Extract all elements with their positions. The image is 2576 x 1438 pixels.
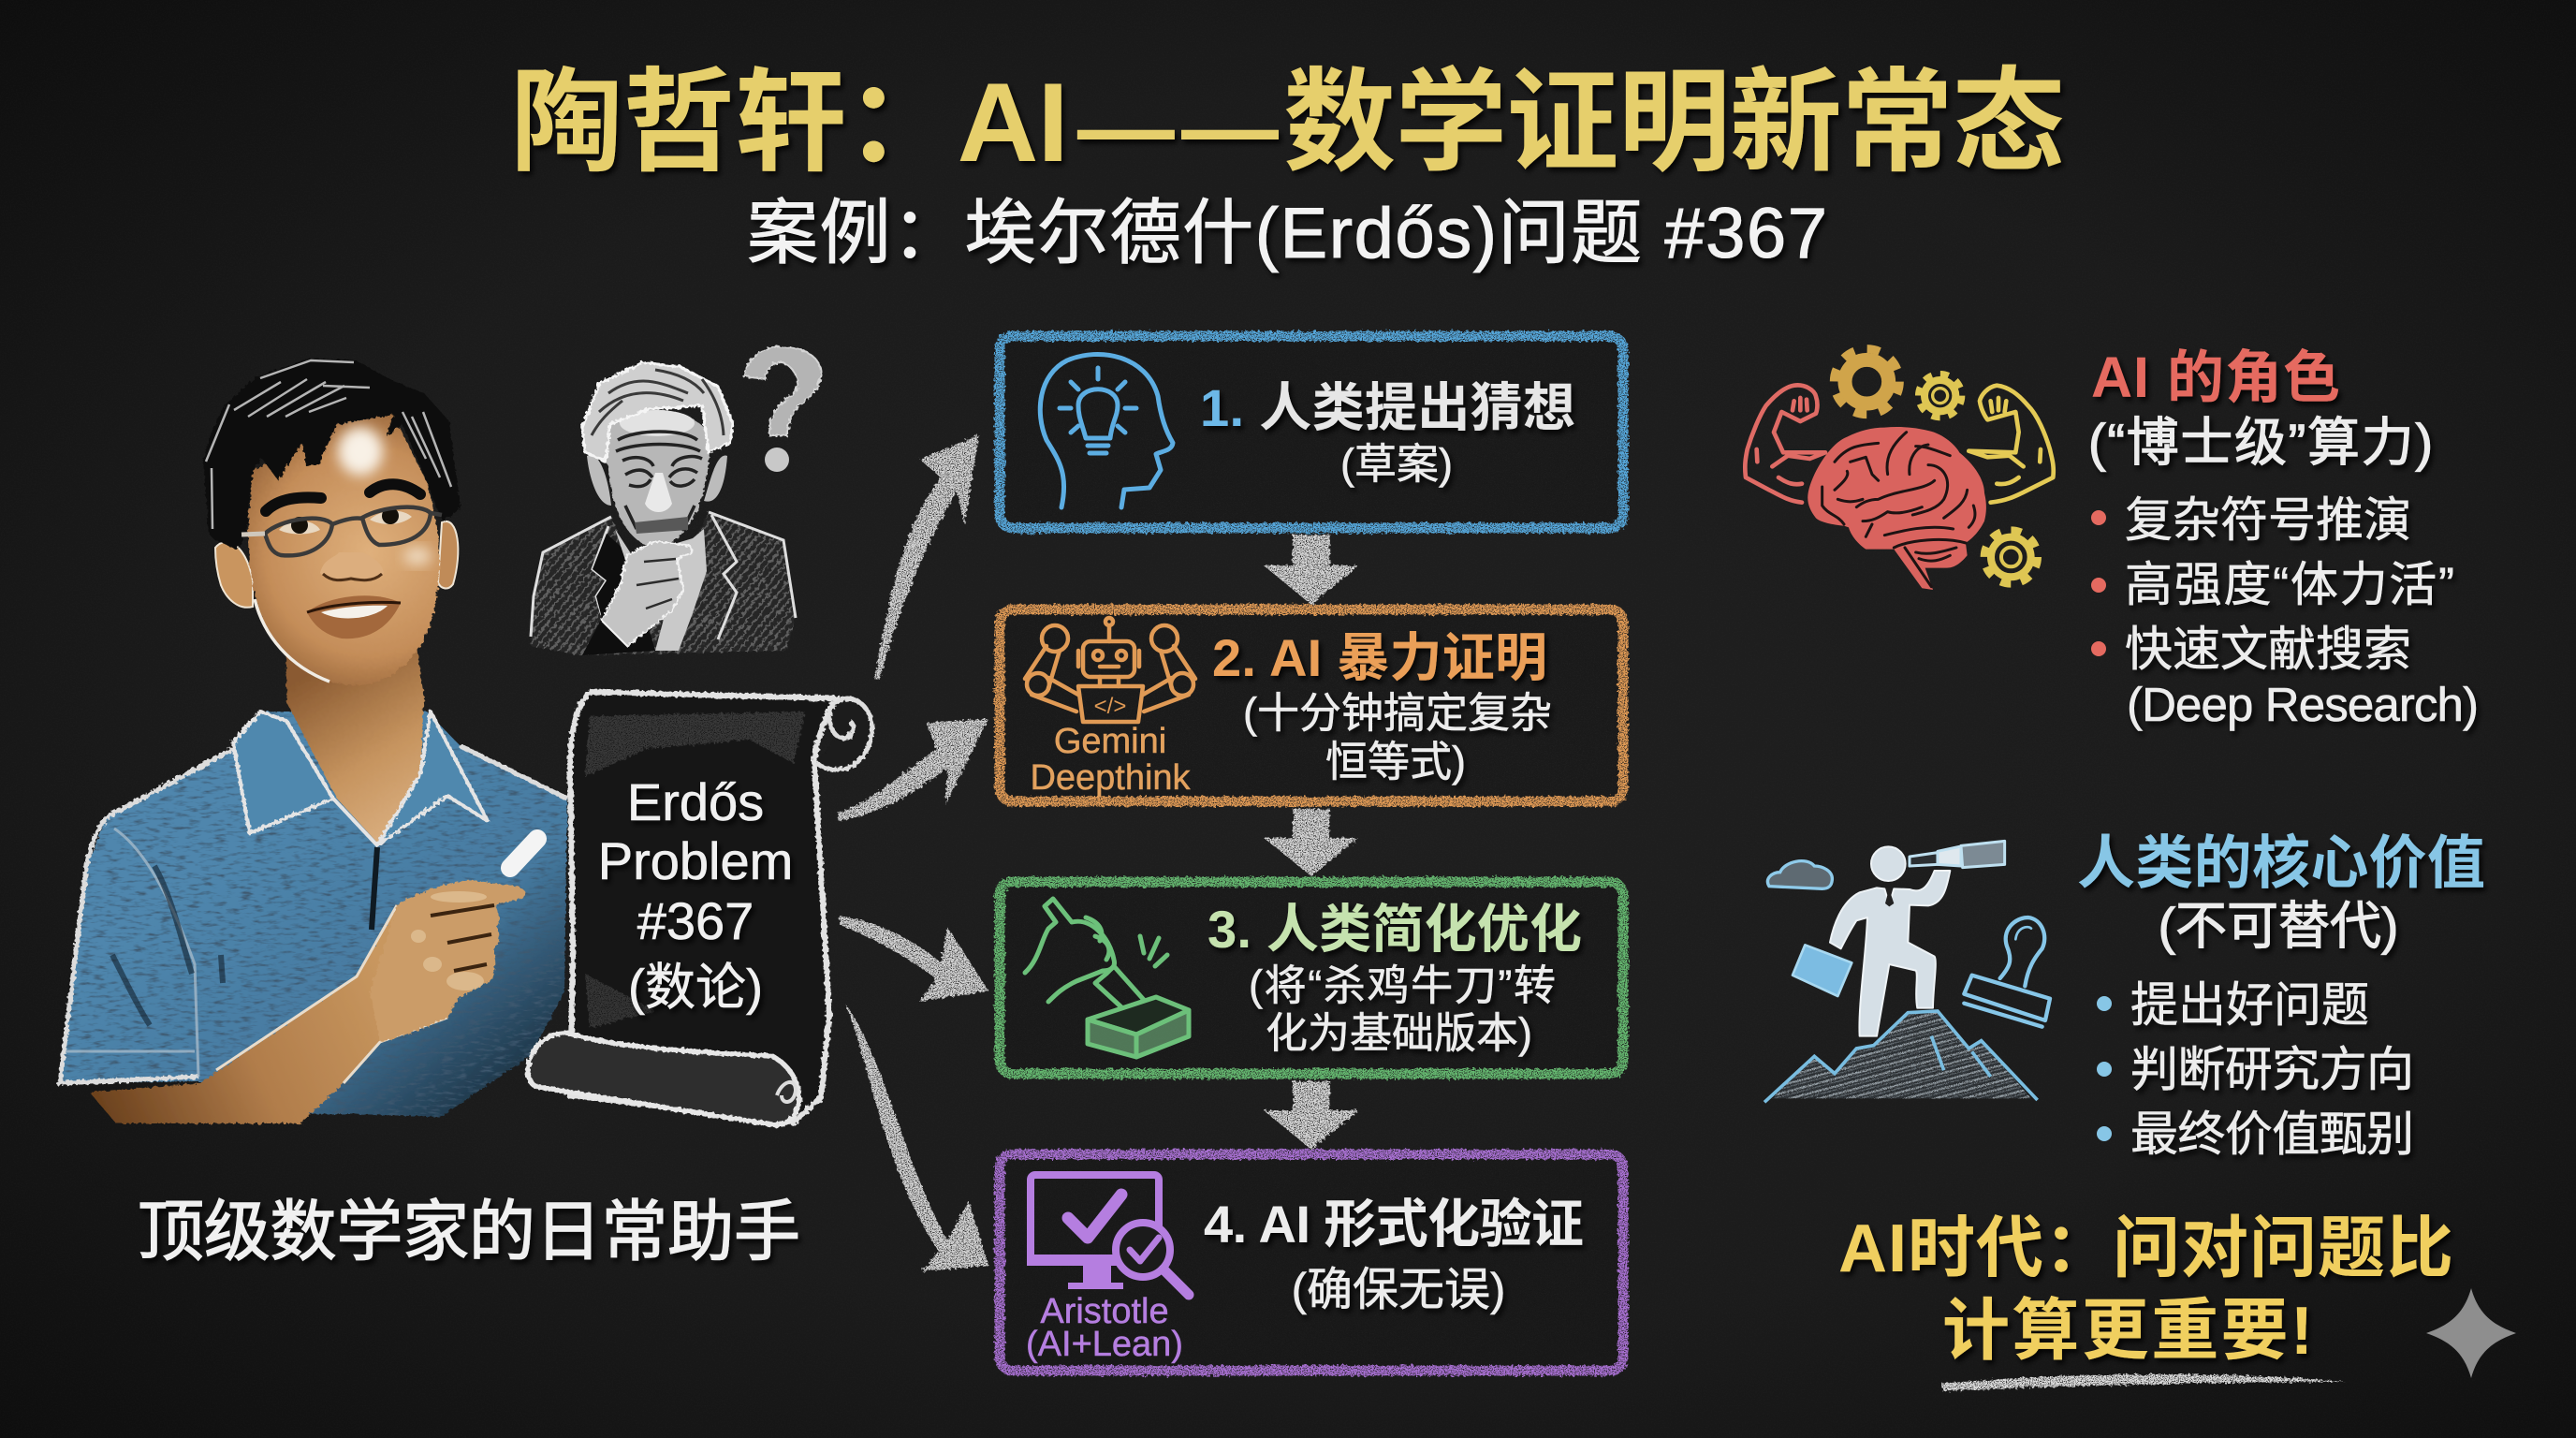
AI role bullets: (Deep Research) [2127, 678, 2479, 731]
cheek highlight [403, 547, 432, 565]
scroll text [598, 772, 793, 1016]
human value bullets: 最终价值甄别 [2130, 1108, 2414, 1161]
shirt front [615, 529, 707, 651]
left ear [215, 542, 253, 608]
AI role bullets: 快速文献搜索 [2125, 623, 2411, 676]
step 3 heading: 3. 人类简化优化 [1208, 900, 1582, 959]
step 1 heading: 1. 人类提出猜想 [1200, 378, 1575, 437]
scroll text: (数论) [628, 960, 763, 1016]
forearm [90, 905, 447, 1123]
question mark dot [765, 448, 789, 472]
hand on chin [602, 541, 693, 646]
nose [645, 473, 672, 512]
icon: strong robot: </> [1094, 694, 1126, 719]
pupils [291, 507, 399, 534]
jacket [531, 512, 796, 655]
icon label: Gemini Deepthink: Deepthink [1030, 758, 1192, 798]
arrow to step 2 [838, 719, 988, 821]
heading: human core value: 人类的核心价值 [2077, 831, 2485, 896]
chalk stick [510, 839, 537, 868]
frame [1000, 1154, 1623, 1371]
gear small [1918, 374, 1962, 418]
step 2 note [1243, 689, 1552, 785]
shirt dark folds [112, 866, 223, 1025]
scroll text: Erdős [627, 772, 764, 831]
head [1871, 846, 1906, 881]
sparkle watermark [2426, 1288, 2516, 1378]
icon: strong robot [1025, 618, 1195, 722]
arrow to step 4 [845, 1004, 988, 1271]
icon: hand with knife on box [1025, 899, 1189, 1057]
wrinkles and eyes [616, 432, 702, 529]
gear lower [1984, 530, 2038, 584]
stamp [1964, 917, 2050, 1027]
heading: AI role: AI 的角色 [2091, 345, 2340, 409]
down arrow 2 [1264, 809, 1358, 876]
AI role bullets: 复杂符号推演 [2125, 493, 2411, 547]
right ear [438, 521, 458, 588]
placket [372, 847, 377, 930]
icon: head with lightbulb [1040, 354, 1173, 507]
icon label: Gemini Deepthink [1030, 722, 1192, 798]
question mark [744, 346, 821, 435]
finger lines [637, 559, 679, 609]
step 3 note [1249, 961, 1556, 1057]
icon label: Aristotle (AI+Lean): (AI+Lean) [1026, 1325, 1183, 1364]
conclusion callout: AI时代：问对问题比 [1838, 1211, 2453, 1286]
title: 陶哲轩：AI——数学证明新常态 [511, 60, 2065, 185]
face [607, 410, 710, 548]
right arm [1969, 386, 2054, 503]
white hair [582, 362, 733, 462]
icon: muscular brain with gears [1745, 349, 2054, 590]
bottom roll [528, 1033, 799, 1125]
step 4 heading: 4. AI 形式化验证 [1204, 1195, 1584, 1254]
step 2 note: 恒等式) [1325, 738, 1466, 785]
finger lines [431, 905, 494, 971]
sub heading: PhD-level compute: (“博士级”算力) [2088, 413, 2433, 472]
neck [285, 646, 424, 843]
step 3: human simplification [1000, 882, 1623, 1074]
glasses [265, 507, 442, 555]
human value bullets: 提出好问题 [2130, 978, 2369, 1032]
telescope [1910, 841, 2005, 868]
step 1: human conjecture [1000, 336, 1623, 528]
bottom curl line [777, 1082, 796, 1102]
caption: daily assistant: 顶级数学家的日常助手 [138, 1196, 800, 1269]
AI role bullets [2091, 493, 2479, 731]
arrow to step 3 [840, 916, 988, 1002]
step 4: AI formal verification [1000, 1154, 1623, 1371]
brain [1808, 427, 1986, 590]
frame [1000, 882, 1623, 1074]
briefcase [1793, 945, 1852, 996]
eyes [279, 511, 412, 534]
hair highlights [206, 360, 451, 529]
icon label: Gemini Deepthink: Gemini [1054, 722, 1166, 761]
upper lip shadow [635, 517, 688, 534]
parchment top hatching [585, 712, 805, 777]
nose [320, 552, 384, 580]
chalk underline [1942, 1374, 2346, 1391]
nose shadow [323, 574, 382, 580]
blue polo shirt [60, 712, 567, 1117]
forehead light [620, 410, 695, 436]
icon: monitor with check and magnifier [1027, 1175, 1189, 1295]
scroll text: Problem [598, 831, 793, 890]
conclusion callout [1838, 1211, 2453, 1391]
frame [1000, 609, 1623, 801]
arrow to step 1 [874, 434, 979, 679]
human value bullets [2097, 978, 2414, 1161]
mountain [1772, 1011, 2031, 1098]
subtitle: 案例：埃尔德什(Erdős)问题 #367 [747, 194, 1827, 273]
knuckle highlights [411, 891, 487, 990]
frame [1000, 336, 1623, 528]
cloud [1767, 861, 1832, 888]
left arm [1745, 385, 1825, 503]
step 2 note: (十分钟搞定复杂 [1243, 689, 1552, 737]
hair [203, 359, 461, 550]
AI role bullets: 高强度“体力活” [2125, 558, 2454, 611]
scroll text: #367 [637, 891, 754, 950]
icon label: Aristotle (AI+Lean): Aristotle [1040, 1292, 1169, 1331]
scroll: Erdős Problem #367 [528, 692, 872, 1125]
step 2: AI brute-force proof [1000, 609, 1623, 801]
down arrow 3 [1264, 1081, 1358, 1150]
hand [370, 880, 526, 1042]
teeth [321, 606, 388, 618]
parchment lower smudge [585, 974, 655, 1028]
forearm edge [216, 905, 447, 1083]
icon: man with telescope on mountain [1764, 841, 2050, 1102]
step 2 heading: 2. AI 暴力证明 [1212, 628, 1547, 687]
jacket outline [531, 512, 796, 639]
glasses temple [242, 534, 265, 535]
sub heading: irreplaceable: (不可替代) [2159, 897, 2398, 955]
step 3 note: (将“杀鸡牛刀”转 [1249, 961, 1556, 1009]
shirt outline [60, 746, 567, 1083]
jaw outline [255, 599, 329, 682]
arrows: scroll to steps [838, 434, 988, 1271]
sleeve seams [66, 829, 198, 1077]
hair strands [592, 370, 724, 435]
panel: AI role [1745, 345, 2479, 731]
gear large [1834, 349, 1899, 415]
ears [587, 455, 727, 506]
figure [1830, 871, 1950, 1036]
illustration: Terence Tao with chalk [60, 359, 567, 1123]
dark lapel [582, 534, 655, 655]
mountain outline [1764, 1011, 2038, 1102]
eyebrows [266, 484, 420, 511]
step 3 note: 化为基础版本) [1266, 1009, 1532, 1057]
icon label: Aristotle (AI+Lean) [1026, 1292, 1183, 1364]
parchment body [570, 692, 836, 1123]
portrait: Paul Erdős [531, 346, 821, 655]
forehead highlight [338, 427, 383, 476]
conclusion callout: 计算更重要! [1942, 1294, 2313, 1369]
tie [1885, 888, 1894, 906]
step 1 note: (草案) [1340, 440, 1453, 488]
human value bullets: 判断研究方向 [2130, 1043, 2414, 1096]
shirt collar [233, 712, 488, 845]
face [248, 415, 440, 685]
step 4 note: (确保无误) [1292, 1265, 1505, 1315]
mouth line [307, 602, 401, 612]
brain folds [1822, 433, 1975, 587]
mouth [307, 595, 401, 638]
top curl [816, 698, 872, 770]
down arrow 1 [1264, 535, 1358, 605]
panel: human core value [1764, 831, 2485, 1161]
